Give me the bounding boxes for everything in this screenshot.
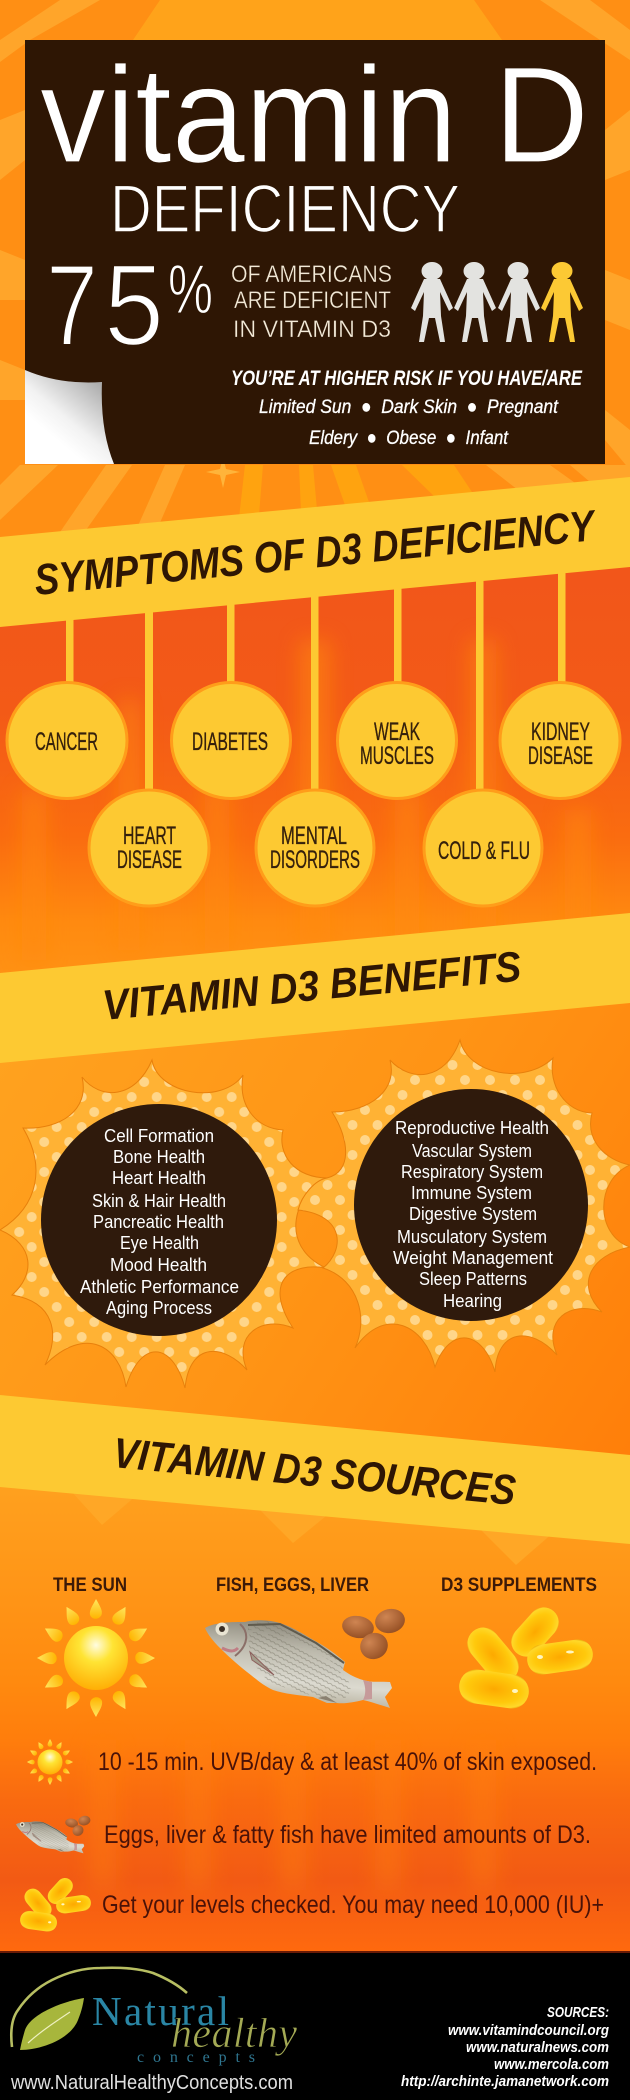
benefits list: left [80,1126,239,1318]
source label: the sun: THE SUN [53,1575,127,1596]
logo word: concepts: concepts [137,2049,255,2066]
logo word: healthy: healthy [171,2011,297,2057]
benefits list: left: Cell Formation [104,1126,214,1146]
statistic: 75 percent: 5 [104,240,164,370]
benefits list: left: Mood Health [110,1255,207,1275]
logo arc [11,1968,187,2047]
symptom labels: KIDNEY [531,718,590,746]
statistic caption: ARE DEFICIENT [234,287,391,314]
benefits list: left: Aging Process [106,1298,212,1318]
panel: sources background [0,1480,630,1960]
symptom labels: DIABETES [192,728,268,756]
band: sources heading [0,1395,630,1544]
icon: sparkle star [206,457,240,488]
benefits list: left: Bone Health [113,1147,205,1167]
benefits list: right: Immune System [411,1183,532,1203]
source label: supplements: D3 SUPPLEMENTS [441,1575,597,1596]
risk factors line 2: Eldery ● Obese ● Infant [309,427,509,449]
sources list [401,2004,609,2090]
benefits list: left: Eye Health [120,1233,199,1253]
band: benefits heading [0,913,630,1063]
benefits list: right [393,1118,553,1311]
icon: page curl [25,370,114,464]
icon: large sun [37,1599,155,1717]
symptom labels: HEART [123,822,176,850]
header panel [25,39,605,464]
benefits list: left: Pancreatic Health [93,1212,224,1232]
icon: large fish [205,1620,392,1708]
statistic caption [231,261,392,343]
sources list: www.naturalnews.com [466,2039,609,2056]
sources list: www.mercola.com [494,2056,609,2073]
logo leaf [20,1998,84,2050]
icon: small fish and eggs [16,1815,91,1853]
benefits list: right: Musculatory System [397,1227,547,1247]
footer [0,1951,630,2100]
symptom labels [35,718,593,874]
benefits list: right: Vascular System [412,1141,532,1161]
symptom labels: COLD & FLU [438,837,530,865]
icon: eggs [340,1606,407,1664]
symptom labels: WEAK [374,718,420,746]
logo [11,1968,297,2066]
symptom labels: DISEASE [117,846,182,874]
sources list: www.vitamindcouncil.org [448,2022,609,2039]
source label: fish eggs liver: FISH, EGGS, LIVER [216,1575,369,1596]
benefits list: left: Heart Health [112,1168,206,1188]
benefits list: right: Digestive System [409,1204,537,1224]
title: vitamin D: vitamin D [40,39,589,192]
band: symptoms heading [0,477,630,627]
symptom labels: CANCER [35,728,98,756]
icon: small capsules [19,1875,92,1933]
symptom labels: DISORDERS [270,846,360,874]
pointer triangles under sources band [70,1490,554,1565]
heading: vitamin D3 sources: VITAMIN D3 SOURCES [111,1430,518,1515]
benefits list: left: Athletic Performance [80,1277,239,1297]
symptom circles [7,682,620,906]
benefits list: right: Hearing [443,1291,502,1311]
benefits list: right: Reproductive Health [395,1118,549,1138]
statistic: 75 percent [46,240,213,370]
benefits list: right: Sleep Patterns [419,1269,527,1289]
symptom labels: MENTAL [281,822,347,850]
benefits list: right: Respiratory System [401,1162,543,1182]
statistic: 75 percent: 7 [46,240,98,370]
benefits sun: left [0,1060,328,1388]
benefits sun: right [298,1040,630,1372]
symptom labels: MUSCLES [360,742,434,770]
panel: symptoms background [0,560,630,1070]
symptom strings [66,565,566,795]
heading: vitamin D3 benefits: VITAMIN D3 BENEFITS [101,944,523,1030]
statistic caption: OF AMERICANS [231,261,392,288]
icon: small sun [27,1739,73,1785]
benefits list: right: Weight Management [393,1248,553,1268]
statistic caption: IN VITAMIN D3 [233,316,391,343]
sources list: http://archinte.jamanetwork.com [401,2073,609,2090]
benefits list: left: Skin & Hair Health [92,1191,226,1211]
icon: three grey people and one yellow person [411,262,583,342]
statistic: 75 percent: % [168,250,213,328]
risk factors line 1: Limited Sun ● Dark Skin ● Pregnant [259,396,559,418]
sunburst background [0,0,630,620]
panel: benefits background [0,995,630,1460]
sources list: SOURCES: [547,2004,609,2021]
subtitle: deficiency: DEFICIENCY [110,171,460,247]
icon: supplement capsules [457,1601,595,1711]
website url: www.NaturalHealthyConcepts.com [10,2071,293,2094]
logo word: natural: Natural [92,1988,229,2034]
